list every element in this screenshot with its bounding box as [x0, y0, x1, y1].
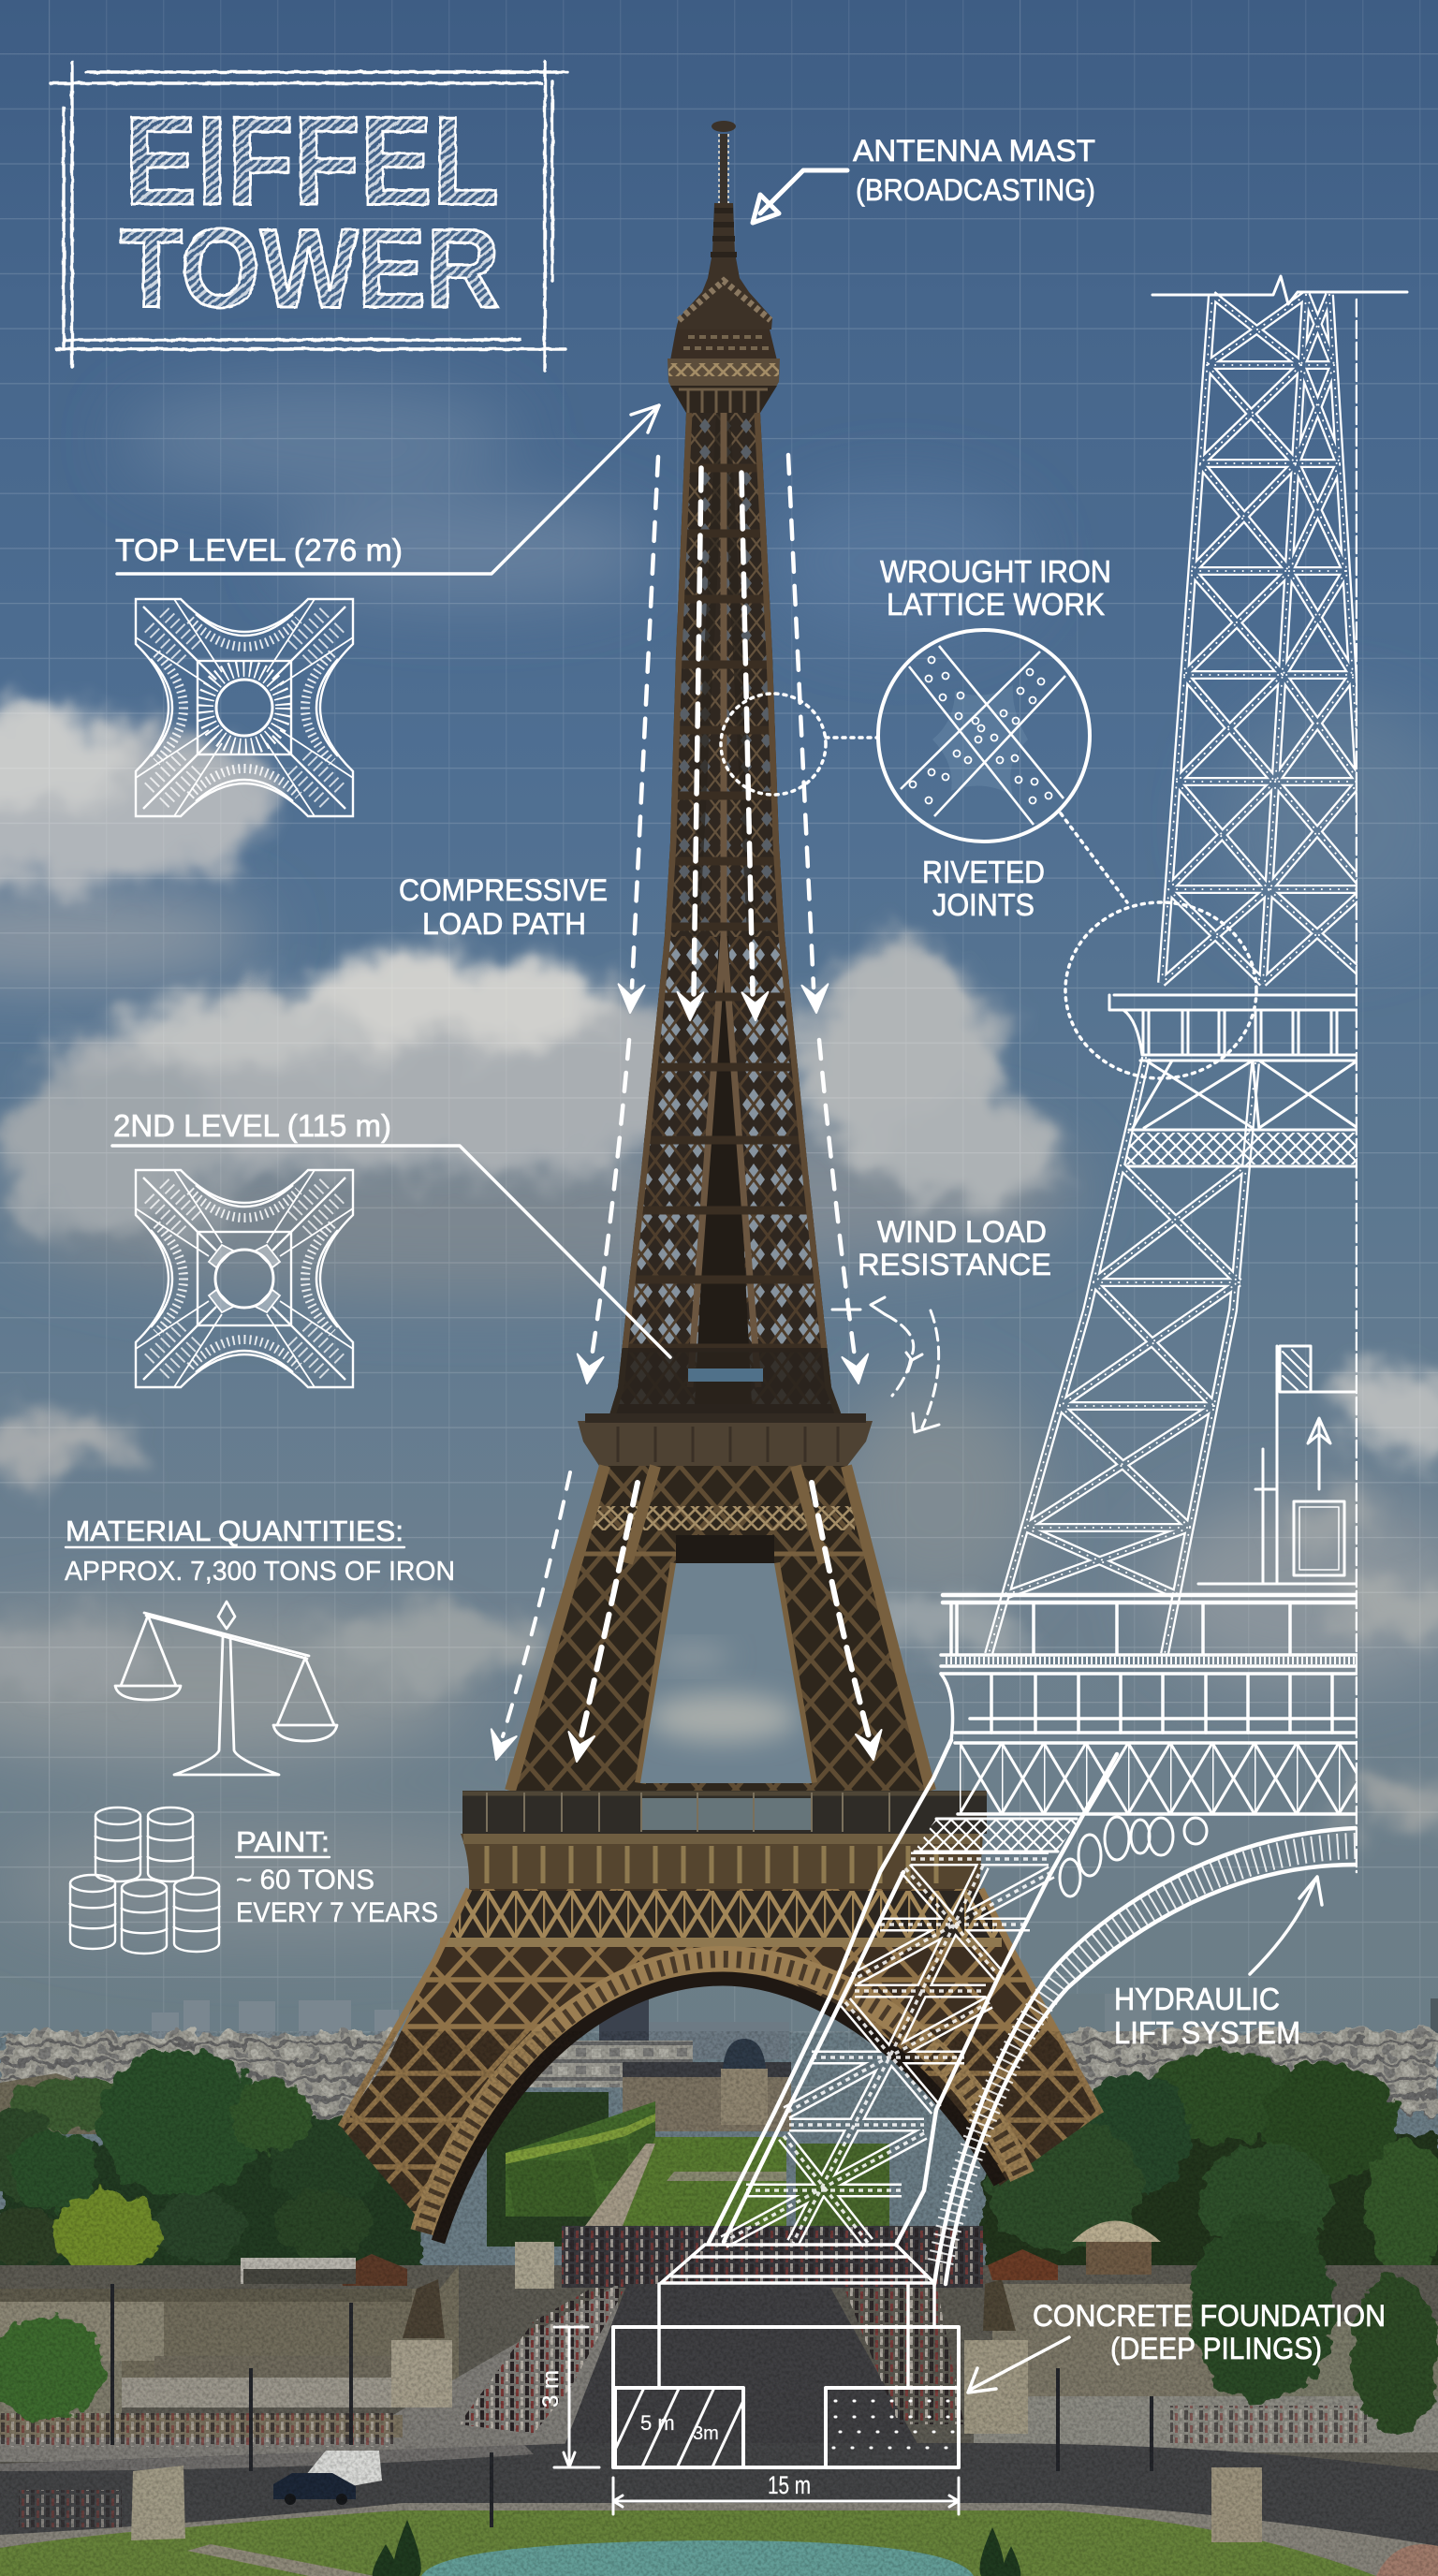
arch ribbons	[423, 1959, 1022, 2232]
blueprint: foundation: 3m	[693, 2423, 719, 2444]
tower: lower arch and legs	[341, 1889, 1101, 2242]
callout: antenna mast: ANTENNA MAST	[853, 134, 1095, 168]
top level observation deck	[668, 359, 780, 413]
title text: EIFFEL	[125, 92, 499, 231]
icon: top level plan	[136, 599, 353, 816]
callout: concrete foundation	[968, 2299, 1386, 2393]
callout: antenna mast: (BROADCASTING)	[856, 173, 1095, 207]
cars	[301, 2451, 382, 2487]
label: compressive load path	[399, 873, 608, 941]
foreground trees	[0, 2214, 1438, 2435]
callout: wrought iron lattice: LATTICE WORK	[887, 587, 1105, 622]
tower: upper shaft lattice	[610, 413, 841, 1413]
callout: top level	[115, 405, 659, 574]
callout: antenna mast	[753, 134, 1095, 223]
blueprint: tower section overlay	[706, 291, 1357, 2286]
blueprint: section break line	[1152, 276, 1407, 304]
callout: concrete foundation: CONCRETE FOUNDATION	[1033, 2299, 1386, 2333]
label: material quantities: APPROX. 7,300 TONS OF IRON	[65, 1557, 455, 1587]
callout: wind load resistance	[832, 1215, 1051, 1432]
city skyline	[0, 1994, 1438, 2134]
cypress shrubs	[373, 2520, 1020, 2576]
trees background	[0, 2048, 1438, 2293]
label: paint: ~ 60 TONS	[236, 1865, 374, 1895]
clouds	[0, 384, 1438, 1938]
label: riveted joints: JOINTS	[932, 887, 1034, 922]
lift mechanism	[1198, 1346, 1356, 1584]
icon: second level plan	[136, 1170, 353, 1387]
callout: second level: 2ND LEVEL (115 m)	[113, 1108, 391, 1143]
blueprint: foundation: 5 m	[640, 2411, 675, 2435]
arrows: compressive load paths upper	[574, 455, 872, 1385]
label: material quantities: MATERIAL QUANTITIES:	[66, 1515, 404, 1547]
rivets on members	[989, 295, 1372, 1654]
kiosks and carousel	[339, 2254, 407, 2286]
rivets	[910, 657, 1052, 803]
label: riveted joints	[922, 855, 1045, 922]
callout: hydraulic lift system	[1114, 1877, 1322, 2050]
leg chords and arch	[709, 1740, 1356, 2284]
first level gallery	[941, 1595, 1357, 1814]
plaza ground	[0, 2220, 1438, 2576]
title box	[51, 62, 567, 371]
callout: wrought iron lattice: WROUGHT IRON	[880, 554, 1111, 589]
arrow: top level	[117, 405, 659, 574]
callout: hydraulic lift system: LIFT SYSTEM	[1114, 2015, 1300, 2050]
label: paint	[236, 1825, 438, 1928]
arrow: foundation	[968, 2337, 1069, 2393]
arch lobes	[1060, 1817, 1207, 1896]
speckled pad	[833, 2401, 955, 2448]
detail circle: riveted joints	[878, 630, 1090, 842]
leader line	[112, 1146, 670, 1357]
arrow: antenna	[753, 170, 847, 223]
tower opening with sky	[637, 1563, 814, 1788]
lamp posts	[112, 2284, 1152, 2527]
blueprint: foundation: 3 m	[538, 2370, 564, 2408]
tower: section between second and first level	[510, 1466, 931, 1791]
tower: spire and top cabin	[668, 121, 780, 413]
title text	[120, 92, 500, 331]
dotted callouts to detail	[721, 694, 1256, 1078]
blueprint: foundation: 15 m	[768, 2471, 811, 2499]
callout: hydraulic lift system: HYDRAULIC	[1114, 1982, 1280, 2016]
label: paint: PAINT:	[236, 1825, 330, 1858]
label: riveted joints: RIVETED	[922, 855, 1045, 889]
blueprint: foundation	[538, 2245, 959, 2514]
label: paint: EVERY 7 YEARS	[236, 1897, 438, 1928]
callout: concrete foundation: (DEEP PILINGS)	[1110, 2332, 1322, 2365]
callout: second level	[112, 1108, 670, 1357]
right edge dashed line	[1356, 300, 1357, 1872]
hatched pad	[616, 2390, 742, 2466]
crowd along avenue	[459, 2284, 627, 2434]
icon: wind arrows	[832, 1297, 939, 1432]
title text: TOWER	[120, 206, 500, 331]
arrows: compressive load paths lower	[484, 1472, 887, 1764]
icon: balance scale	[115, 1602, 337, 1775]
callout: wind load resistance: WIND LOAD	[877, 1215, 1047, 1249]
callout: wrought iron lattice	[880, 554, 1111, 622]
lattice members	[721, 291, 1357, 2248]
dimensions	[554, 2327, 959, 2514]
label: material quantities	[65, 1515, 455, 1587]
pedestals and statues	[391, 2340, 452, 2408]
callout: top level: TOP LEVEL (276 m)	[115, 533, 403, 567]
tower: first level glass deck	[461, 1791, 987, 1889]
tower: second level platform	[578, 1413, 873, 1466]
upper platform	[1109, 995, 1357, 1166]
label: compressive load path: LOAD PATH	[422, 907, 586, 941]
fountain pool	[421, 2540, 974, 2576]
hedges and lawn on Champ de Mars	[487, 2092, 609, 2247]
label: compressive load path: COMPRESSIVE	[399, 873, 608, 907]
callout: wind load resistance: RESISTANCE	[858, 1248, 1051, 1281]
arrow: hydraulic	[1250, 1877, 1322, 1974]
icon: paint barrels	[69, 1808, 220, 1954]
photo texture	[0, 2031, 1438, 2576]
